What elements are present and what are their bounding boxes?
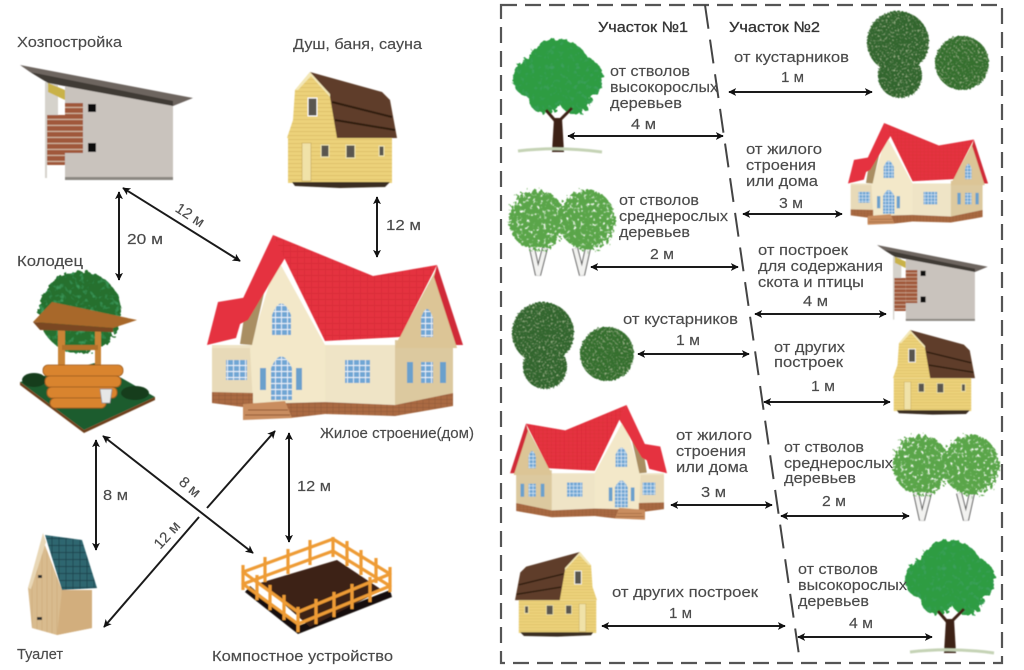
right panel labels: plot 2: от жилого <box>746 141 822 158</box>
right panel labels: plot 2: среднерослых <box>784 455 894 472</box>
right panel labels: plot 1: или дома <box>676 459 749 476</box>
left diagram arrows <box>96 188 377 627</box>
right panel labels: plot 2: 1 м <box>781 69 804 86</box>
right panel labels: plot 2: 4 м <box>849 615 873 632</box>
right panel labels: plot 2: для содержания <box>758 258 883 275</box>
left diagram labels: 8 м <box>103 487 128 504</box>
right panel labels: plot 2: построек <box>774 354 843 371</box>
right panel labels: plot 2: деревьев <box>798 593 869 610</box>
right panel labels: plot 1: 1 м <box>669 605 692 622</box>
icon: main house <box>207 235 463 420</box>
right panel labels: plot 2: от стволов <box>784 439 864 456</box>
heading: plot 1: Участок №1 <box>598 19 688 36</box>
left diagram labels: 12 м <box>172 200 207 231</box>
right panel labels: plot 1: высокорослых <box>610 79 719 96</box>
icon: well <box>20 271 155 433</box>
right panel labels: plot 1: от кустарников <box>623 311 738 328</box>
right panel labels: plot 1: 1 м <box>676 332 700 349</box>
icon: shrubs, plot 2 <box>867 11 989 98</box>
right panel labels: plot 2: скота и птицы <box>758 274 864 291</box>
right panel labels: plot 1: 4 м <box>631 116 656 133</box>
icon: medium trees, plot 1 <box>509 190 615 275</box>
right panel labels: plot 1: от других построек <box>612 584 758 601</box>
left diagram labels: 12 м <box>297 478 331 495</box>
right panel labels: plot 2: 4 м <box>803 293 828 310</box>
right panel labels: plot 1 <box>610 63 758 622</box>
right panel labels: plot 1: от жилого <box>676 427 752 444</box>
icon: house, plot 2 <box>848 123 988 225</box>
left diagram labels: 20 м <box>127 231 163 248</box>
right panel labels: plot 2: от построек <box>758 242 848 259</box>
icon: outbuilding, plot 1 <box>515 552 597 637</box>
right panel labels: plot 2: строения <box>746 157 816 174</box>
right panel labels: plot 1: от стволов <box>610 63 690 80</box>
right panel labels: plot 2: от других <box>774 339 846 356</box>
right panel labels: plot 2: 2 м <box>822 493 846 510</box>
right panel labels: plot 1: 3 м <box>701 484 726 501</box>
right panel labels: plot 1: от стволов <box>619 192 699 209</box>
right panel labels: plot 2: высокорослых <box>798 577 908 594</box>
right panel labels: plot 1: деревьев <box>619 224 690 241</box>
illustration: right panel icons <box>509 11 999 653</box>
left diagram labels <box>17 34 474 665</box>
right panel labels: plot 2 <box>734 49 908 632</box>
right panel labels: plot 1: среднерослых <box>619 208 729 225</box>
icon: utility shed <box>20 65 193 180</box>
right panel labels: plot 2: деревьев <box>784 470 856 487</box>
left diagram labels: Жилое строение(дом) <box>320 425 474 442</box>
icon: tall tree, plot 1 <box>513 39 603 152</box>
heading: plot 2: Участок №2 <box>729 19 820 36</box>
icon: outbuilding, plot 2 <box>893 330 975 415</box>
left diagram labels: 8 м <box>175 474 204 501</box>
right panel labels: plot 2: 1 м <box>811 378 835 395</box>
right panel labels: plot 2: или дома <box>746 173 819 190</box>
left diagram labels: Колодец <box>17 253 83 270</box>
right panel labels: plot 2: 3 м <box>779 195 803 212</box>
icon: livestock shed, plot 2 <box>877 245 988 321</box>
right panel arrows <box>568 92 932 637</box>
icon: house, plot 1 <box>510 405 667 520</box>
left diagram labels: Туалет <box>17 646 63 663</box>
illustration: left diagram buildings <box>20 65 463 635</box>
icon: sauna cabin <box>287 72 397 188</box>
panel: plot boundaries <box>501 5 1002 663</box>
right panel labels: plot 2: от стволов <box>798 561 878 578</box>
icon: outhouse <box>28 533 97 635</box>
right panel labels: plot 1: деревьев <box>610 95 682 112</box>
icon: shrubs, plot 1 <box>512 302 634 389</box>
icon: compost enclosure <box>243 537 392 634</box>
right panel labels: plot 1: строения <box>676 443 746 460</box>
icon: tall tree, plot 2 <box>905 540 995 653</box>
right panel labels: plot 1: 2 м <box>650 246 674 263</box>
left diagram labels: Душ, баня, сауна <box>293 36 423 53</box>
icon: medium trees, plot 2 <box>893 435 999 520</box>
left diagram labels: 12 м <box>151 518 184 553</box>
left diagram labels: Компостное устройство <box>212 648 393 665</box>
right panel labels: plot 2: от кустарников <box>734 49 849 66</box>
left diagram labels: Хозпостройка <box>17 34 123 51</box>
left diagram labels: 12 м <box>386 217 421 234</box>
